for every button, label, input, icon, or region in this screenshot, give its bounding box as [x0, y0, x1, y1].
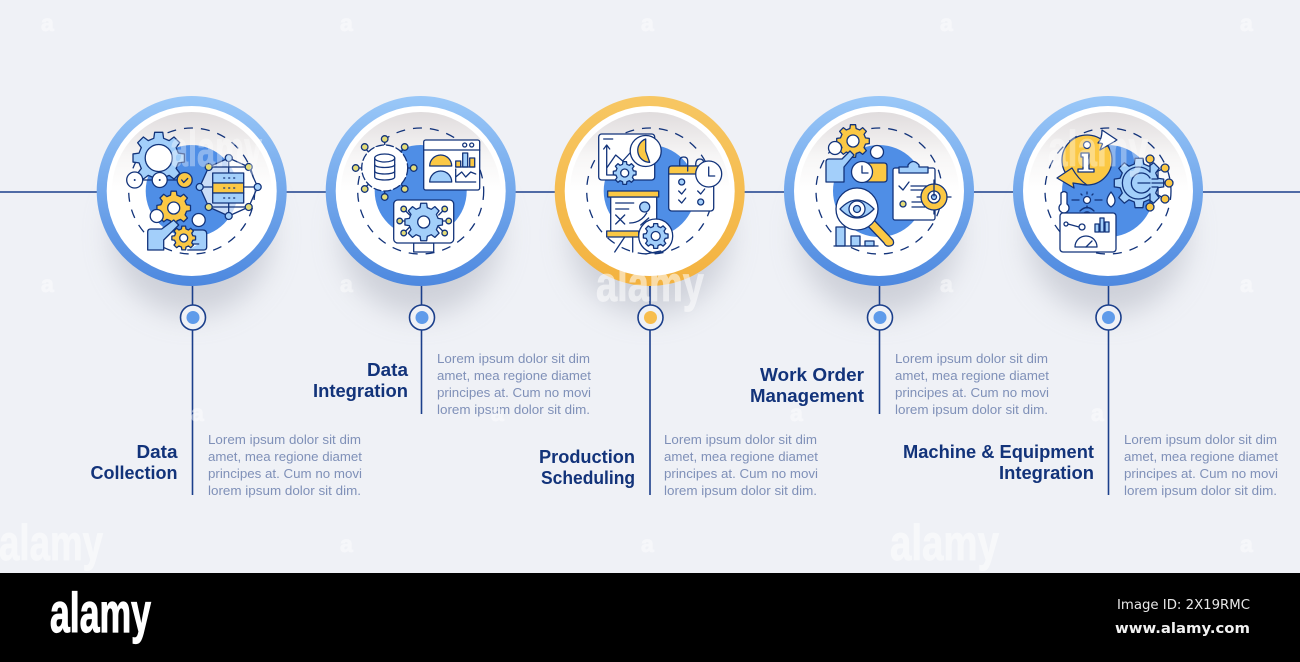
text block: production scheduling: Lorem ipsum dolor sit dim — [664, 432, 817, 447]
watermarks: a — [1240, 531, 1253, 557]
panel: data integration circle — [326, 96, 516, 315]
text block: production scheduling: lorem ipsum dolor sit dim. — [664, 483, 817, 498]
watermarks: alamy — [890, 515, 999, 571]
text block: work order management: Lorem ipsum dolor sit dim — [895, 351, 1048, 366]
icon: data integration — [352, 136, 480, 252]
text block: machine and equipment integration: Lorem ipsum dolor sit dim — [1124, 432, 1277, 447]
text block: data collection: lorem ipsum dolor sit dim. — [208, 483, 361, 498]
heading: work order management: Management — [750, 385, 864, 406]
timeline horizontal line — [0, 191, 1300, 193]
watermarks: a — [340, 531, 353, 557]
heading: production scheduling: Scheduling — [541, 467, 635, 488]
watermarks: a — [940, 271, 953, 297]
text block: data collection: principes at. Cum no movi — [208, 466, 362, 481]
connector lines and markers — [180, 286, 1121, 495]
watermarks: a — [641, 531, 654, 557]
watermarks: a — [491, 400, 504, 426]
text block: data integration: Lorem ipsum dolor sit dim — [437, 351, 590, 366]
watermarks: a — [41, 271, 54, 297]
text block: data collection: Lorem ipsum dolor sit dim — [208, 432, 361, 447]
icon: work order management — [826, 125, 951, 246]
heading: work order management: Work Order — [760, 364, 864, 385]
panel: data collection circle — [97, 96, 287, 315]
icon: data collection — [127, 132, 261, 250]
watermarks: a — [1240, 10, 1253, 36]
text block: data integration: lorem ipsum dolor sit dim. — [437, 402, 590, 417]
heading: machine and equipment integration: Integration — [999, 462, 1094, 483]
heading: data collection: Collection — [90, 462, 178, 483]
footer image id: Image ID: 2X19RMC — [1117, 598, 1250, 613]
footer url: www.alamy.com — [1115, 621, 1250, 637]
text block: production scheduling: principes at. Cum no movi — [664, 466, 818, 481]
heading: data integration: Integration — [313, 380, 408, 401]
text block: machine and equipment integration: principes at. Cum no movi — [1124, 466, 1278, 481]
text block: data collection: amet, mea regione diamet — [208, 449, 362, 464]
panel: work order management circle — [784, 96, 974, 315]
heading: data integration: Data — [367, 359, 409, 380]
watermarks: a — [41, 10, 54, 36]
heading: production scheduling: Production — [539, 446, 635, 467]
text block: machine and equipment integration: amet, mea regione diamet — [1124, 449, 1278, 464]
icon: production scheduling — [599, 134, 722, 254]
footer logo: alamy — [50, 581, 151, 644]
text block: work order management: principes at. Cum no movi — [895, 385, 1049, 400]
text block: work order management: amet, mea regione diamet — [895, 368, 1049, 383]
watermarks: alamy — [170, 121, 262, 177]
text block: machine and equipment integration: lorem ipsum dolor sit dim. — [1124, 483, 1277, 498]
watermarks: a — [191, 400, 204, 426]
watermarks: a — [1240, 271, 1253, 297]
watermarks: a — [790, 400, 803, 426]
text block: work order management: lorem ipsum dolor sit dim. — [895, 402, 1048, 417]
text block: data integration: amet, mea regione diamet — [437, 368, 591, 383]
watermarks: a — [340, 10, 353, 36]
icon: machine and equipment integration — [1057, 130, 1173, 252]
watermarks: alamy — [596, 256, 704, 312]
watermarks: a — [940, 10, 953, 36]
watermarks: alamy — [0, 515, 103, 571]
footer bar — [0, 573, 1300, 662]
watermarks: a — [1091, 400, 1104, 426]
heading: data collection: Data — [136, 441, 178, 462]
heading: machine and equipment integration: Machine & Equipment — [903, 441, 1094, 462]
panel: machine and equipment integration circle — [1013, 96, 1203, 315]
watermarks: a — [641, 10, 654, 36]
text block: data integration: principes at. Cum no movi — [437, 385, 591, 400]
text block: production scheduling: amet, mea regione diamet — [664, 449, 818, 464]
watermarks: a — [340, 271, 353, 297]
watermarks: alamy — [1048, 121, 1148, 177]
panel: production scheduling circle — [555, 96, 745, 315]
